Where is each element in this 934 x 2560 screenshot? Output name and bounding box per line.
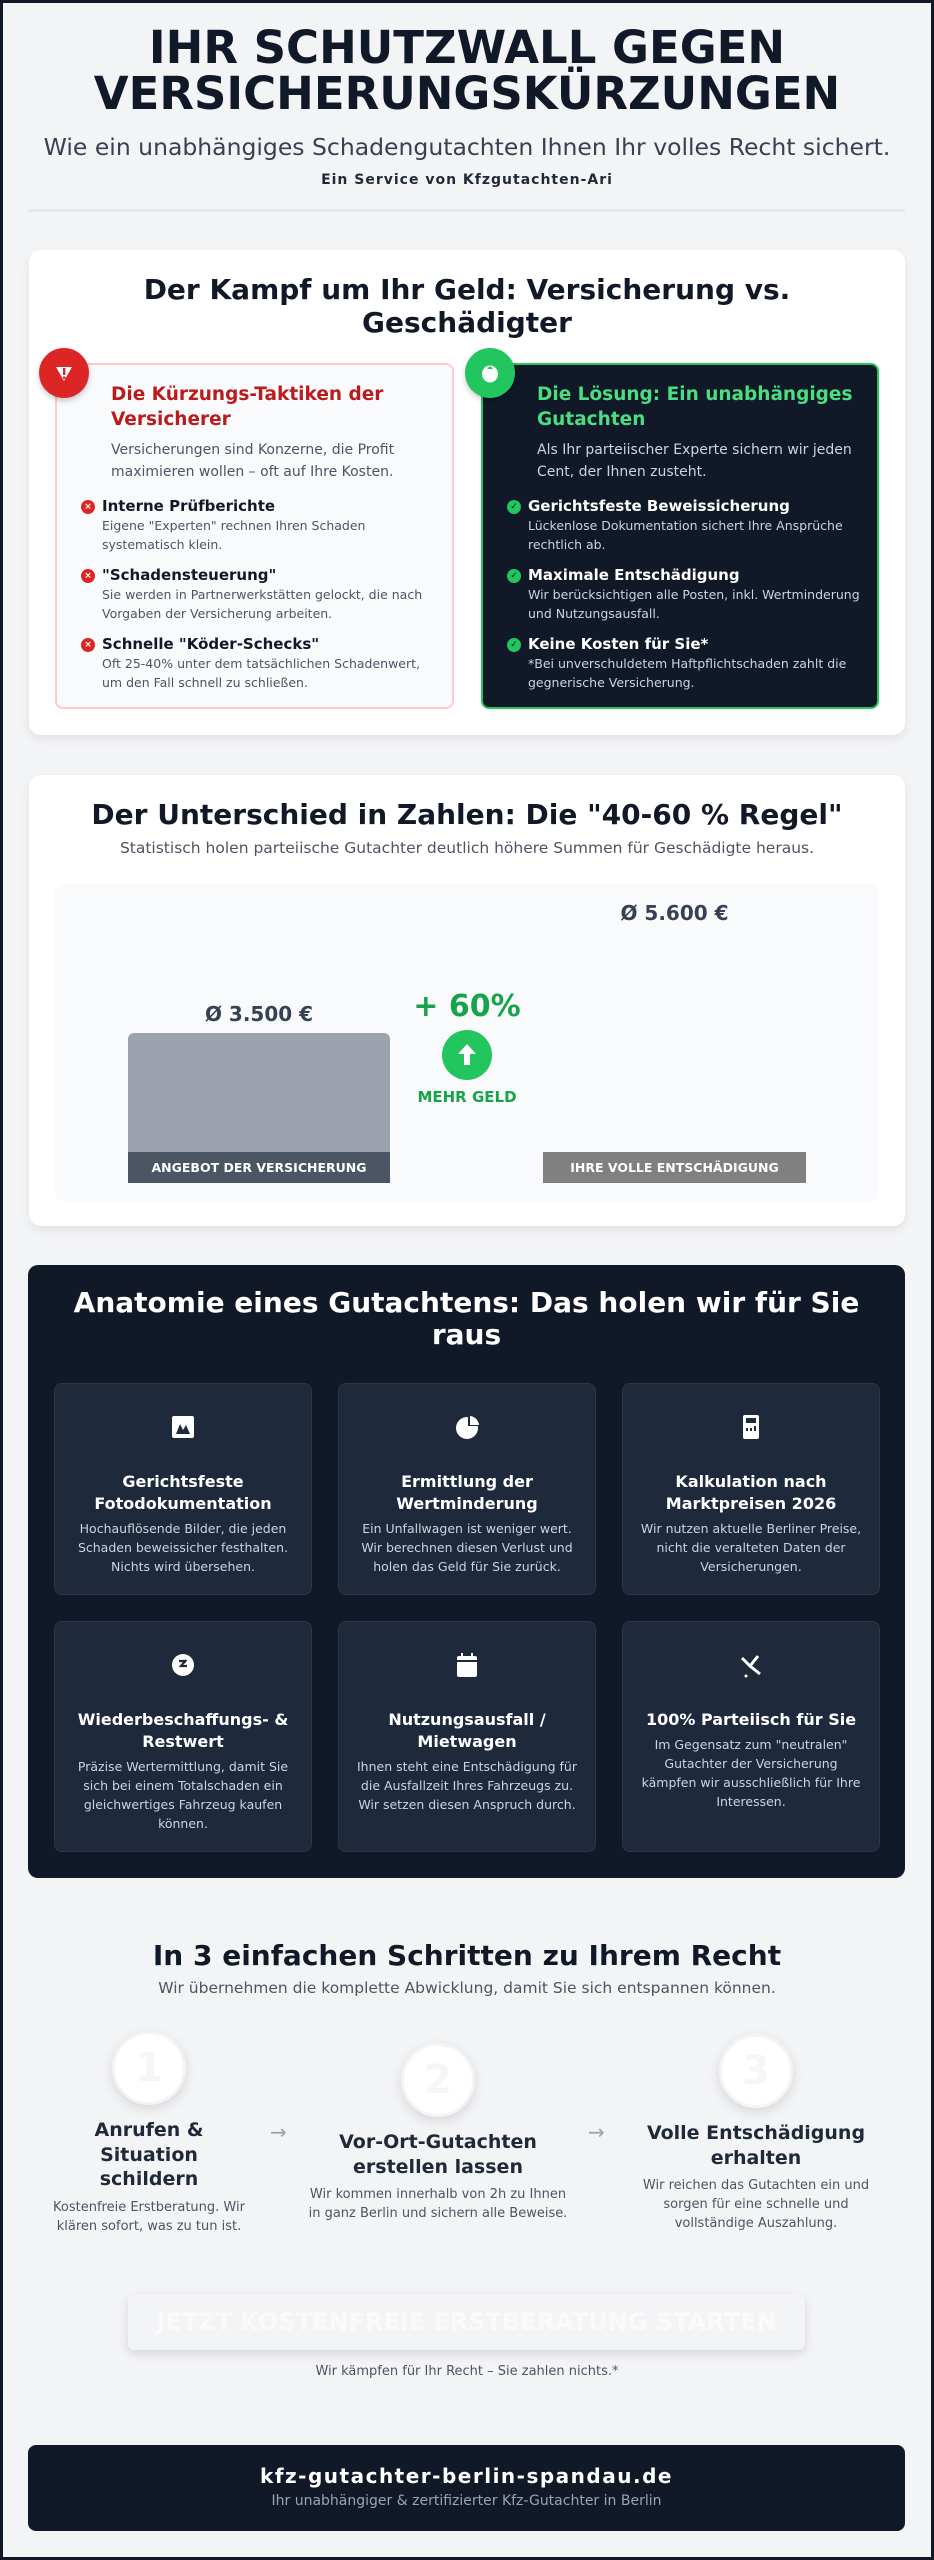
step 2: erstellen lassen (353, 2156, 523, 2178)
box: lösung: Wir berücksichtigen alle Posten, inkl. Wertminderung und Nutzungsausfall. (528, 587, 860, 621)
icon: warning badge (39, 348, 89, 398)
box: kürzungs-taktiken: Interne Prüfberichte (102, 497, 275, 515)
panel: anatomie eines gutachtens (28, 1265, 905, 1878)
box: kürzungs-taktiken: × (84, 571, 92, 581)
tile: kalkulation: Kalkulation nach Marktpreisen 2026 (666, 1472, 836, 1513)
tile: foto: Hochauflösende Bilder, die jeden Schaden beweissicher festhalten. Nichts wird übersehen. (78, 1521, 288, 1574)
tile: wertminderung: Ermittlung der Wertminderung (396, 1472, 538, 1513)
items (81, 497, 422, 690)
box: kürzungs-taktiken: Schnelle "Köder-Schecks" (102, 635, 319, 653)
step 1: Situation (100, 2144, 198, 2166)
callout: +60%: MEHR GELD (417, 1088, 517, 1106)
box: kürzungs-taktiken: × (84, 502, 92, 512)
heading: raus (432, 1318, 501, 1351)
step 1: 1 (135, 2045, 163, 2091)
step 3: Volle Entschädigung (647, 2122, 865, 2144)
heading: Der Unterschied in Zahlen: Die "40-60 % Regel" (91, 798, 843, 831)
footer (28, 2445, 905, 2531)
tile: parteiisch: 100% Parteiisch für Sie (646, 1710, 856, 1729)
box: kürzungs-taktiken: "Schadensteuerung" (102, 566, 276, 584)
heading: Die Kürzungs-Taktiken der Versicherer (111, 384, 383, 430)
step 2: Wir kommen innerhalb von 2h zu Ihnen in ganz Berlin und sichern alle Beweise. (309, 2187, 567, 2221)
bar chart (55, 884, 879, 1201)
bar: volle entschädigung: IHRE VOLLE ENTSCHÄDIGUNG (570, 1160, 779, 1175)
step 1: schildern (100, 2168, 198, 2190)
box: kürzungs-taktiken: Oft 25-40% unter dem tatsächlichen Schadenwert, um den Fall schnell zu schließen. (102, 656, 420, 690)
box: lösung: ✓ (510, 640, 518, 650)
cta button (128, 2294, 805, 2350)
title: VERSICHERUNGSKÜRZUNGEN (94, 67, 840, 120)
subtitle: Statistisch holen parteiische Gutachter deutlich höhere Summen für Geschädigte heraus. (120, 839, 814, 857)
panel heading: Geschädigter (362, 306, 572, 339)
tile: wertminderung (338, 1383, 596, 1595)
bar: volle entschädigung (543, 901, 806, 1183)
heading: Anatomie eines Gutachtens: Das holen wir für Sie (74, 1286, 859, 1319)
panel: 40-60 % regel (29, 775, 905, 1226)
heading (74, 1286, 859, 1351)
bar: angebot: ANGEBOT DER VERSICHERUNG (151, 1160, 367, 1175)
description: Versicherungen sind Konzerne, die Profit maximieren wollen – oft auf Ihre Kosten. (111, 442, 394, 480)
step 3: 3 (742, 2048, 770, 2094)
callout: +60%: + 60% (413, 989, 521, 1024)
items (507, 497, 860, 690)
tile: parteiisch (622, 1621, 880, 1852)
subtitle: Wie ein unabhängiges Schadengutachten Ihnen Ihr volles Recht sichert. (44, 133, 890, 161)
cta note: Wir kämpfen für Ihr Recht – Sie zahlen nichts.* (315, 2364, 619, 2379)
tile: nutzungsausfall: Nutzungsausfall / Mietwagen (388, 1710, 546, 1751)
section: 3 schritte heading: In 3 einfachen Schritten zu Ihrem Recht (153, 1939, 781, 1972)
step 1 (53, 2034, 245, 2234)
step 1: Kostenfreie Erstberatung. Wir klären sofort, was zu tun ist. (53, 2200, 245, 2234)
box: lösung (481, 363, 879, 709)
box: kürzungs-taktiken (55, 363, 454, 709)
step 2 (309, 2046, 567, 2221)
panel: versicherung vs geschädigter (29, 250, 905, 735)
header (44, 21, 890, 188)
footer: Ihr unabhängiger & zertifizierter Kfz-Gutachter in Berlin (272, 2493, 661, 2509)
step 2: Vor-Ort-Gutachten (339, 2131, 537, 2153)
tile: nutzungsausfall: Ihnen steht eine Entschädigung für die Ausfallzeit Ihres Fahrzeugs zu. Wir setzen diesen Anspruch durch. (357, 1759, 577, 1812)
box: lösung: Gerichtsfeste Beweissicherung (528, 497, 790, 515)
tile: wiederbeschaffung: Präzise Wertermittlung, damit Sie sich bei einem Totalschaden ein gleichwertiges Fahrzeug kaufen können. (78, 1759, 288, 1831)
tile: parteiisch: Im Gegensatz zum "neutralen" Gutachter der Versicherung kämpfen wir ausschließlich für Ihre Interessen. (642, 1737, 860, 1809)
title (94, 21, 840, 120)
description: Als Ihr parteiischer Experte sichern wir jeden Cent, der Ihnen zusteht. (537, 442, 852, 480)
box: lösung: *Bei unverschuldetem Haftpflichtschaden zahlt die gegnerische Versicherung. (528, 656, 846, 690)
title: IHR SCHUTZWALL GEGEN (149, 21, 785, 74)
box: kürzungs-taktiken: Eigene "Experten" rechnen Ihren Schaden systematisch klein. (102, 518, 365, 552)
bar: volle entschädigung: Ø 5.600 € (620, 901, 729, 925)
tile: kalkulation: Wir nutzen aktuelle Berliner Preise, nicht die veralteten Daten der Versicherungen. (641, 1521, 861, 1574)
step 3: erhalten (711, 2146, 801, 2168)
tile: foto: Gerichtsfeste Fotodokumentation (94, 1472, 272, 1513)
panel heading (144, 273, 790, 339)
tile: kalkulation (622, 1383, 880, 1595)
box: lösung: ✓ (510, 502, 518, 512)
box: lösung: Maximale Entschädigung (528, 566, 740, 584)
box: lösung: Lückenlose Dokumentation sichert Ihre Ansprüche rechtlich ab. (528, 518, 843, 552)
footer: kfz-gutachter-berlin-spandau.de (260, 2464, 673, 2488)
cta button: JETZT KOSTENFREIE ERSTBERATUNG STARTEN (157, 2308, 776, 2336)
arrow 2: → (588, 2120, 605, 2144)
section: 3 schritte heading (153, 1939, 781, 1997)
icon: solution badge (465, 348, 515, 398)
box: lösung: ✓ (510, 571, 518, 581)
box: kürzungs-taktiken: Sie werden in Partnerwerkstätten gelockt, die nach Vorgaben der Versicherung arbeiten. (102, 587, 422, 621)
step 2: 2 (424, 2057, 452, 2103)
byline: Ein Service von Kfzgutachten-Ari (321, 172, 613, 188)
tile: wertminderung: Ein Unfallwagen ist weniger wert. Wir berechnen diesen Verlust und holen das Geld für Sie zurück. (361, 1521, 573, 1574)
step 3 (643, 2037, 869, 2231)
section: 3 schritte heading: Wir übernehmen die komplette Abwicklung, damit Sie sich entspannen können. (158, 1979, 776, 1997)
tile: wiederbeschaffung: Wiederbeschaffungs- & Restwert (78, 1710, 288, 1751)
tile: foto (54, 1383, 312, 1595)
callout: +60% (413, 989, 521, 1106)
step 3: Wir reichen das Gutachten ein und sorgen für eine schnelle und vollständige Auszahlung. (643, 2178, 869, 2231)
arrow 1: → (270, 2120, 287, 2144)
step 1: Anrufen & (94, 2119, 204, 2141)
bar: angebot (128, 1002, 390, 1183)
panel heading: Der Kampf um Ihr Geld: Versicherung vs. (144, 273, 790, 306)
box: kürzungs-taktiken: × (84, 640, 92, 650)
bar: angebot: Ø 3.500 € (205, 1002, 313, 1026)
tile: wiederbeschaffung (54, 1621, 312, 1852)
tile: nutzungsausfall (338, 1621, 596, 1852)
heading: Die Lösung: Ein unabhängiges Gutachten (537, 384, 852, 430)
box: lösung: Keine Kosten für Sie* (528, 635, 708, 653)
